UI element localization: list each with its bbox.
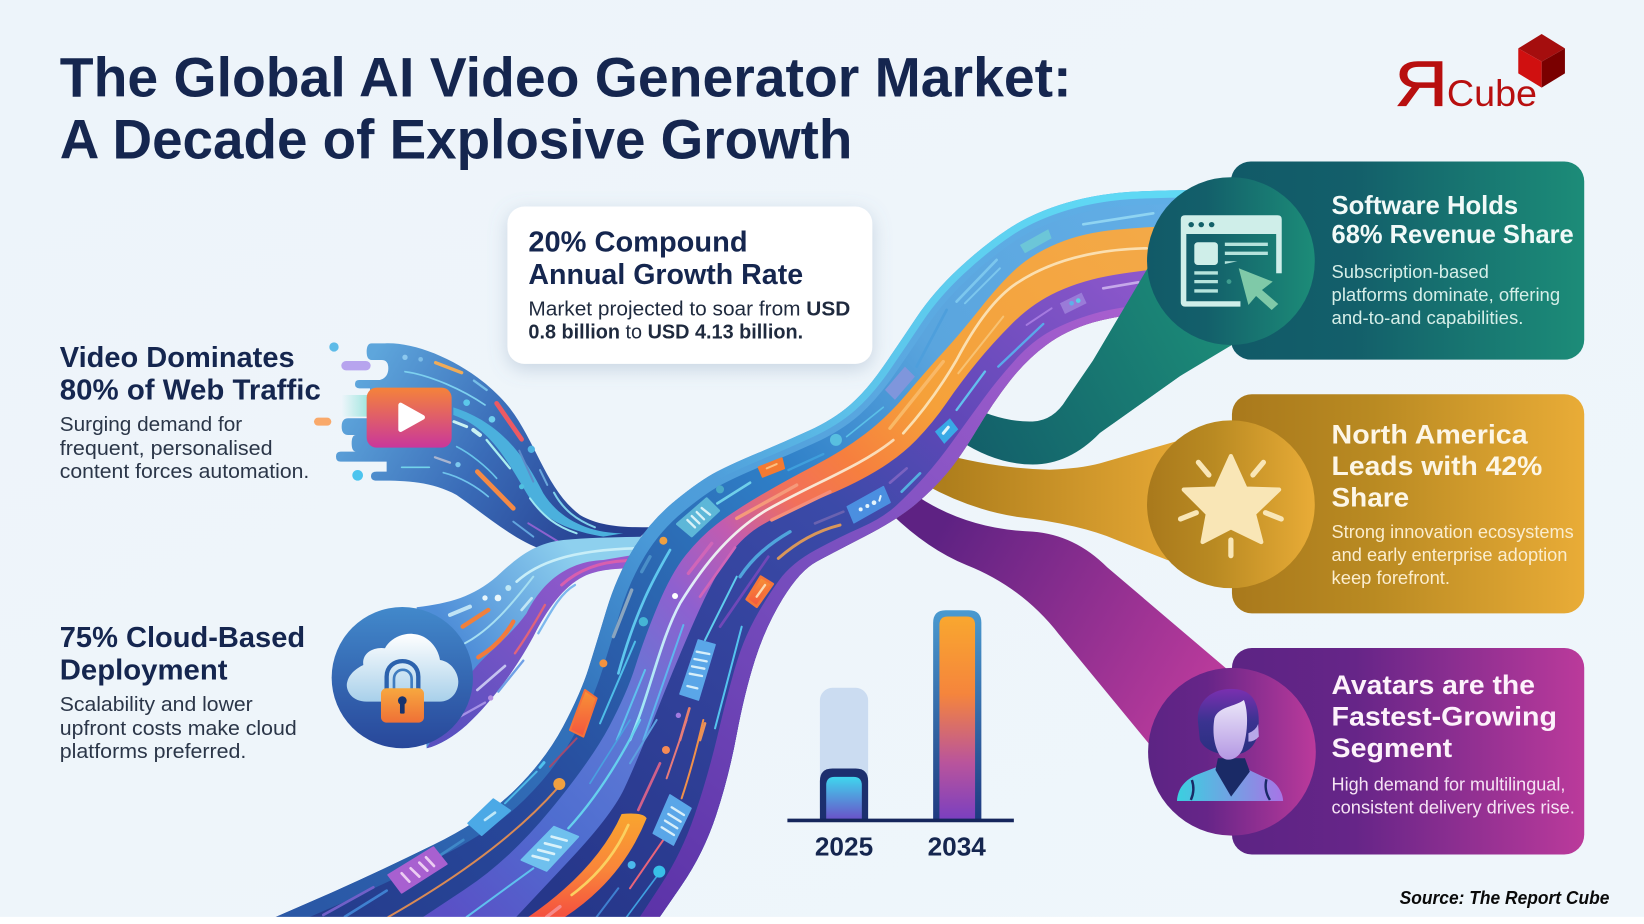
text block: cloud deployment: Scalability and lower <box>60 693 253 716</box>
main growth ribbon <box>275 190 1237 917</box>
text block: video traffic: Video Dominates <box>60 341 295 373</box>
text block: cloud deployment: Deployment <box>60 653 228 685</box>
text block: cloud deployment <box>60 621 305 763</box>
logo: RCube: Cube <box>1447 73 1537 114</box>
orange document on ribbon <box>570 690 597 737</box>
icon circle: avatar <box>1148 668 1316 836</box>
callout: CAGR: 20% Compound <box>528 226 748 258</box>
heading: software <box>1332 190 1574 249</box>
cloud ribbon <box>417 537 647 748</box>
heading: north america: Leads with 42% <box>1332 450 1542 481</box>
body: north america: keep forefront. <box>1332 567 1450 588</box>
text block: cloud deployment: 75% Cloud-Based <box>60 621 305 653</box>
lane: outer purple <box>640 307 1124 917</box>
callout: CAGR <box>507 207 872 364</box>
body: software: platforms dominate, offering <box>1332 284 1560 305</box>
panel: software <box>1147 161 1584 360</box>
branch: gold connector <box>925 419 1248 587</box>
icon circle: software window <box>1147 177 1315 345</box>
text block: video traffic: content forces automation. <box>60 460 309 483</box>
text block: video traffic: 80% of Web Traffic <box>60 373 321 405</box>
heading: north america: North America <box>1332 418 1528 449</box>
text block: video traffic: Surging demand for <box>60 413 242 436</box>
body: north america <box>1332 521 1574 588</box>
video ribbon <box>336 343 650 550</box>
bar chart: 2025 vs 2034: 2034 <box>928 832 986 862</box>
heading: avatars: Segment <box>1332 732 1452 763</box>
ribbon details: middle section <box>599 440 920 740</box>
body: avatars: consistent delivery drives rise. <box>1332 797 1575 818</box>
callout: CAGR: 0.8 billion to USD 4.13 billion. <box>528 321 803 344</box>
body: north america: and early enterprise adoption <box>1332 544 1567 565</box>
lane: indigo <box>516 270 1146 917</box>
text block: cloud deployment: platforms preferred. <box>60 740 246 763</box>
callout: CAGR: Market projected to soar from USD <box>528 298 850 321</box>
body: avatars <box>1332 774 1575 818</box>
panel: avatars <box>1148 648 1584 854</box>
title: The Global AI Video Generator Market: <box>60 46 1072 108</box>
body: software: Subscription-based <box>1332 261 1489 282</box>
branch: teal connector <box>959 210 1248 464</box>
body: software <box>1332 261 1560 328</box>
heading: north america <box>1332 418 1542 512</box>
edge strip: cyan highlight <box>754 190 1186 460</box>
heading: avatars: Fastest-Growing <box>1332 701 1557 732</box>
bar chart: 2025 vs 2034: 2025 <box>815 832 873 862</box>
heading: north america: Share <box>1332 481 1409 512</box>
bottom strip <box>0 917 1644 924</box>
source note: Source: The Report Cube <box>1400 887 1609 908</box>
icon: video play <box>318 342 452 481</box>
lane: orange to violet <box>424 226 1154 917</box>
ribbon details: lower section <box>323 720 703 917</box>
branch: teal connector overlap <box>1094 252 1237 425</box>
body: avatars: High demand for multilingual, <box>1332 774 1565 795</box>
edge strip: blue <box>275 190 1237 917</box>
branch: purple connector <box>891 493 1237 755</box>
text block: video traffic <box>60 341 321 483</box>
title: A Decade of Explosive Growth <box>60 108 852 170</box>
text block: cloud deployment: upfront costs make cloud <box>60 717 297 740</box>
panel: north america <box>1147 394 1584 613</box>
body: software: and-to-and capabilities. <box>1332 307 1523 328</box>
logo: RCube: Я <box>1394 48 1448 120</box>
icon circle: star <box>1147 420 1315 588</box>
bar chart: 2025 vs 2034 <box>787 610 1014 862</box>
heading: software: 68% Revenue Share <box>1332 219 1574 249</box>
title <box>60 46 1072 170</box>
ribbon details: upper section <box>830 213 1153 446</box>
text block: video traffic: frequent, personalised <box>60 437 273 460</box>
heading: software: Software Holds <box>1332 190 1518 220</box>
callout: CAGR: Annual Growth Rate <box>528 258 803 290</box>
icon: cloud lock <box>332 607 473 748</box>
heading: avatars <box>1332 669 1557 763</box>
heading: avatars: Avatars are the <box>1332 669 1535 700</box>
body: north america: Strong innovation ecosystems <box>1332 521 1574 542</box>
logo: RCube <box>1394 34 1565 120</box>
lane: blue <box>275 190 1237 917</box>
